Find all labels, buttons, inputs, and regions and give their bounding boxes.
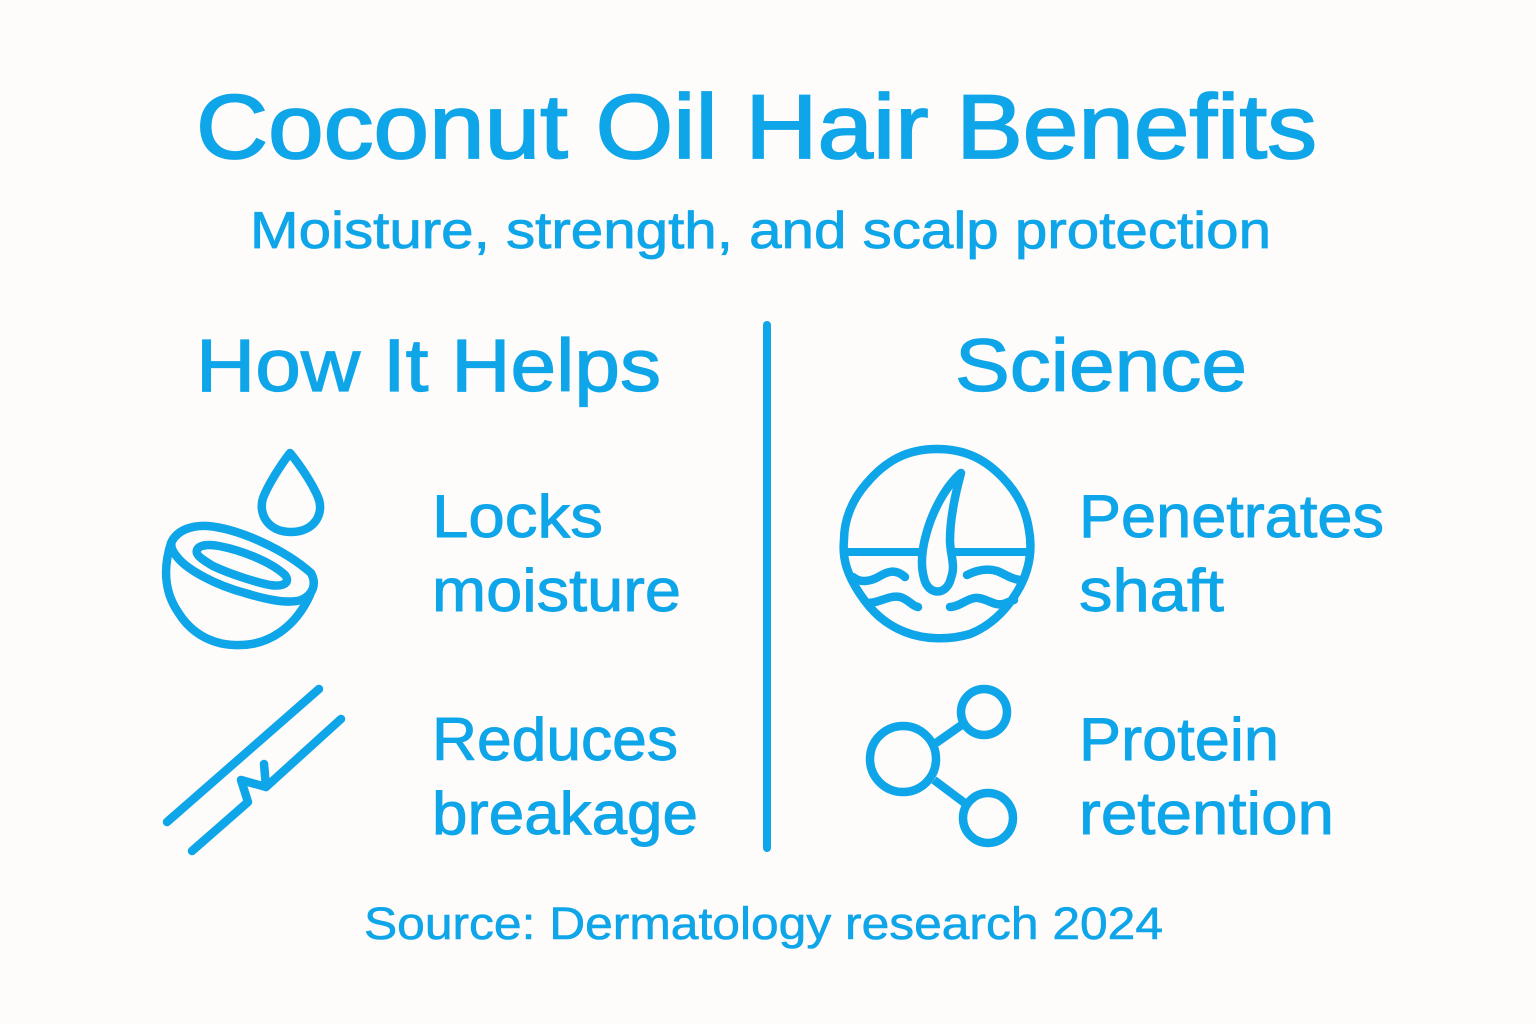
item text: reduces breakage (432, 706, 698, 847)
title: Coconut Oil Hair Benefits (196, 77, 1317, 178)
item text: reduces breakage: breakage (432, 780, 698, 847)
item text: protein retention: retention (1079, 780, 1334, 847)
item text: penetrates shaft: Penetrates (1079, 483, 1384, 550)
item text: penetrates shaft (1079, 483, 1384, 624)
source note: Source: Dermatology research 2024 (364, 898, 1163, 949)
heading: how it helps: How It Helps (196, 324, 661, 407)
item text: protein retention (1079, 706, 1334, 847)
icon: broken hair strand (167, 689, 341, 851)
item text: protein retention: Protein (1079, 706, 1279, 773)
item text: locks moisture: Locks (432, 483, 603, 550)
panel: science (844, 324, 1384, 847)
panel: how it helps (166, 324, 698, 851)
icon: coconut and oil drop (166, 453, 320, 645)
item text: reduces breakage: Reduces (432, 706, 678, 773)
heading: science: Science (955, 324, 1247, 407)
icon: protein molecule (870, 689, 1013, 843)
subtitle: Moisture, strength, and scalp protection (250, 202, 1271, 260)
item text: penetrates shaft: shaft (1079, 557, 1224, 624)
item text: locks moisture: moisture (432, 557, 681, 624)
icon: hair follicle cross-section (844, 449, 1030, 638)
divider (763, 321, 771, 852)
item text: locks moisture (432, 483, 681, 624)
